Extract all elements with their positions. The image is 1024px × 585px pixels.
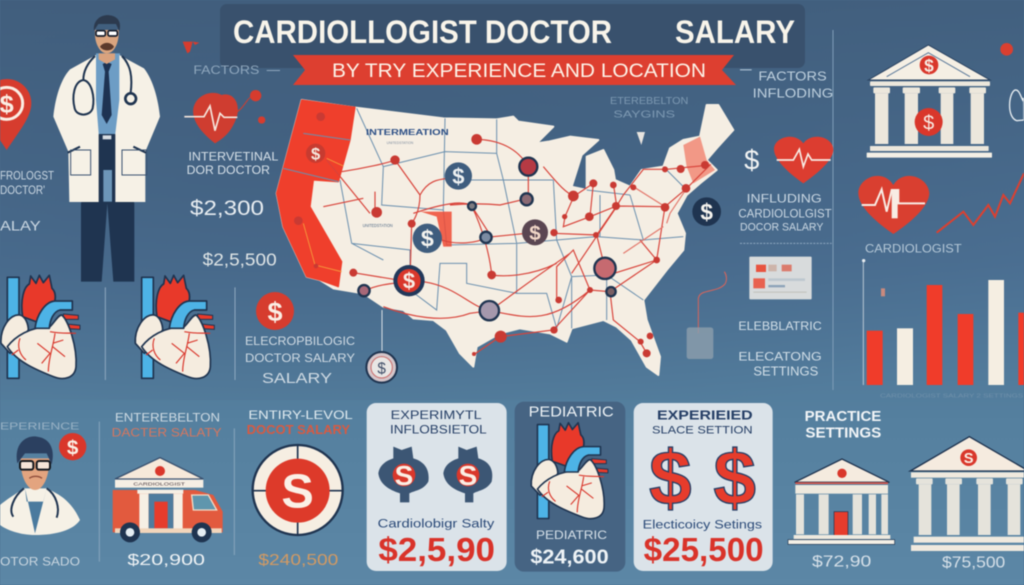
electrophysiology settings label (738, 319, 822, 378)
heart pulse icon (774, 137, 833, 183)
interventional doctor label: DOR DOCTOR (187, 163, 270, 177)
dollar target: S (281, 465, 314, 519)
experienced card: SLACE SETTION (652, 424, 753, 436)
top right map caption (610, 96, 688, 120)
heart anatomy left (1, 275, 80, 378)
factors label: FACTORS (193, 63, 259, 77)
ambulance with temple: CARDIOLOGIST (133, 482, 186, 487)
white heart outline (1010, 90, 1024, 121)
money bags: S (395, 460, 413, 491)
interventional column: DACTER SALATY (112, 425, 222, 439)
title banner (220, 4, 805, 68)
settings card (749, 257, 812, 299)
doctor portrait (0, 436, 80, 535)
top right map caption: SAYGINS (613, 109, 675, 120)
experienced card (634, 403, 773, 571)
influencing label: DOCOR SALARY (740, 222, 824, 234)
pediatric panel: PEDIATRIC (529, 405, 614, 421)
salary value: $2,5,500 (203, 249, 277, 269)
electrophysiology salary group (245, 292, 355, 387)
interventional column: $20,900 (127, 552, 205, 569)
small building (788, 459, 895, 544)
location pin with dollar: $ (0, 91, 14, 119)
dollar badge (59, 433, 86, 460)
bottom row right, scaled 3x: $72,90 (812, 554, 871, 571)
heart anatomy (531, 423, 608, 519)
map labels (363, 128, 449, 228)
electrophysiology label: DOCTOR SALARY (245, 351, 355, 365)
left specialty label: DOCTOR' (0, 183, 45, 197)
bank building icon: $ (924, 55, 934, 75)
large building: S (964, 451, 974, 467)
heart pulse icon (184, 90, 265, 143)
interventional doctor label (187, 150, 278, 177)
practice settings label (805, 409, 882, 442)
factors influencing label: INFLODING (753, 86, 833, 100)
influencing label (738, 192, 832, 234)
connector and tablet device (687, 272, 726, 359)
bottom row right, scaled 3x (515, 402, 1024, 572)
routes (323, 139, 710, 355)
rising line (937, 173, 1024, 233)
entry-level column: ENTIRY-LEVOL (248, 408, 353, 422)
dollar icon: $ (267, 297, 283, 327)
interventional column (112, 411, 223, 569)
influencing label: CARDIOLOLGIST (738, 206, 832, 220)
factors influencing label: FACTORS (758, 70, 827, 84)
map labels: UNITEDSTATION (387, 141, 414, 145)
west coast highlighted states (277, 100, 355, 287)
title: CARDIOLLOGIST DOCTOR (233, 14, 612, 50)
interventional doctor label: INTERVETINAL (188, 150, 278, 164)
interventional column: ENTEREBELTON (115, 411, 220, 425)
doctor figure (53, 15, 160, 282)
left specialty label (0, 168, 55, 234)
ambulance with temple (113, 458, 223, 542)
heart pulse large (858, 176, 929, 234)
city markers: ring nodes (358, 158, 616, 320)
experienced card: Electicoicy Setings (643, 517, 762, 531)
entry-level column: $240,500 (258, 552, 338, 569)
electrophysiology label: SALARY (262, 370, 332, 387)
entry-level column: DOCOT SALARY (247, 423, 351, 437)
city markers: dollar badges: $ (452, 164, 464, 189)
city markers: dollar badges: $ (311, 144, 321, 163)
pediatric panel: $24,600 (530, 547, 609, 569)
big dollar signs (649, 436, 756, 521)
practice settings label: SETTINGS (805, 426, 882, 442)
practice settings label: PRACTICE (805, 409, 882, 425)
city markers: small red nodes (294, 112, 709, 357)
large building (910, 437, 1024, 551)
mini red marker (183, 42, 199, 53)
experience column: OTOR SADO (0, 554, 80, 568)
city markers: dollar badges: $ (529, 222, 541, 245)
bottom location badge: $ (377, 360, 386, 377)
map of the USA (277, 96, 733, 383)
heart anatomy second (135, 275, 214, 378)
experience card: $2,5,90 (378, 532, 495, 569)
New England highlight (683, 137, 715, 183)
location pin with dollar (0, 79, 31, 150)
city markers: dollar badges: $ (700, 199, 713, 225)
red badge (1000, 43, 1013, 56)
bar chart (862, 259, 1024, 400)
left specialty label: ALAY (0, 218, 41, 234)
right column, scaled 3x (738, 30, 1024, 400)
bottom location badge (366, 310, 397, 383)
Colorado highlight (421, 212, 452, 247)
experience column: EPERIENCE (0, 421, 80, 432)
money bags (378, 447, 492, 502)
experience card: INFLOBSIETOL (390, 422, 487, 436)
map labels: UNITEDSTATION (363, 223, 393, 228)
city markers: dollar badges: $ (421, 226, 434, 252)
bank building icon: $ (923, 112, 934, 134)
factors label (193, 63, 280, 77)
electrophysiology settings label: ELECATONG (738, 350, 822, 364)
city markers: dollar badges: $ (403, 269, 415, 294)
bar chart: CARDIOLOGIST SALARY 2 SETTINGS (880, 394, 1024, 400)
experience column (0, 421, 86, 568)
electrophysiology label (245, 334, 355, 387)
dollar sign: $ (744, 144, 759, 175)
experienced card: EXPERIEIED (657, 408, 753, 422)
salary value: $2,300 (190, 196, 264, 220)
dollar badge: $ (67, 436, 79, 459)
map labels: INTERMEATION (366, 128, 449, 137)
state borders (283, 108, 687, 328)
pediatric panel (515, 402, 625, 572)
experience card (367, 403, 507, 571)
experience card: Cardiolobigr Salty (378, 517, 495, 531)
top right map caption: ETEREBELTON (610, 96, 688, 107)
subtitle ribbon (293, 55, 736, 85)
title banner: SALARY (675, 14, 795, 50)
subtitle ribbon: BY TRY EXPERIENCE AND LOCATION (332, 61, 706, 82)
entry-level column (247, 408, 353, 569)
influencing label: INFLUDING (747, 192, 822, 206)
big dollar signs: $ (713, 436, 756, 521)
cardiologist label: CARDIOLOGIST (865, 242, 962, 256)
electrophysiology settings label: SETTINGS (753, 364, 818, 378)
bank building icon (867, 45, 992, 158)
land (277, 100, 733, 375)
big dollar signs: $ (649, 436, 692, 521)
bottom row left, scaled 3x (0, 403, 507, 571)
experience card: EXPERIMYTL (391, 408, 482, 422)
electrophysiology settings label: ELEBBLATRIC (738, 319, 822, 333)
electrophysiology label: ELECROPBILOGIC (245, 334, 355, 348)
small map pin (637, 132, 645, 145)
left specialty label: FROLOGST (0, 168, 55, 182)
city markers: dollar badges (306, 144, 721, 296)
bottom row right, scaled 3x: $75,500 (942, 554, 1005, 571)
pediatric panel: PEDIATRIC (536, 528, 607, 542)
dollar target (253, 445, 343, 535)
money bags: S (459, 460, 477, 491)
left column, scaled 3x (0, 15, 280, 380)
factors influencing label (740, 69, 833, 100)
experienced card: $25,500 (644, 532, 764, 569)
